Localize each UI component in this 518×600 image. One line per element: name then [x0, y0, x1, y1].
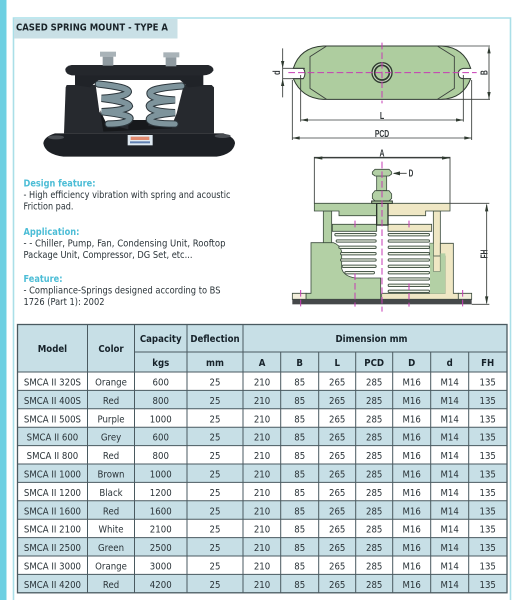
table header: mm [206, 357, 224, 369]
table rows: 800 [153, 451, 169, 462]
table rows: M16 [403, 543, 421, 554]
table rows: 265 [329, 579, 345, 591]
table rows: M16 [403, 451, 421, 462]
table rows: 85 [294, 451, 305, 462]
table rows: SMCA II 500S [24, 414, 81, 426]
table rows: Red [103, 579, 119, 591]
table rows: M14 [441, 451, 459, 462]
table rows: M14 [441, 414, 459, 426]
table rows: Red [103, 395, 119, 407]
table rows: 1200 [150, 487, 172, 499]
table header: PCD [364, 357, 384, 369]
table rows: M14 [441, 487, 459, 499]
table rows: M14 [441, 377, 459, 389]
plan view diagram: B [480, 70, 491, 75]
table rows: Orange [95, 377, 127, 389]
table rows: 85 [294, 432, 305, 444]
table rows: M16 [403, 469, 421, 481]
section view diagram: A [379, 149, 385, 160]
table rows: 135 [480, 561, 496, 573]
table rows: 135 [480, 395, 496, 407]
product photo: spring mount [43, 52, 235, 157]
table rows: 265 [329, 395, 345, 407]
table header: Capacity [140, 333, 182, 345]
table rows: 210 [254, 377, 270, 389]
table rows: 265 [329, 487, 345, 499]
table rows: 85 [294, 561, 305, 573]
table rows: 285 [366, 506, 382, 518]
table rows: 2100 [150, 524, 172, 536]
table rows: 265 [329, 432, 345, 444]
table rows: 210 [254, 506, 270, 518]
table rows: 135 [480, 524, 496, 536]
table rows: 285 [366, 561, 382, 573]
table rows: 210 [254, 432, 270, 444]
section view diagram: D [409, 169, 413, 180]
text block: feature: Feature: [24, 274, 62, 285]
plan view diagram: L [380, 111, 384, 122]
table rows: 265 [329, 377, 345, 389]
table rows: 285 [366, 377, 382, 389]
table rows: 285 [366, 469, 382, 481]
table rows: 285 [366, 524, 382, 536]
table rows: 600 [153, 377, 169, 389]
plan view diagram: PCD [375, 129, 389, 140]
table rows: Red [103, 506, 119, 518]
table header: Dimension mm [336, 333, 407, 345]
table rows: M16 [403, 377, 421, 389]
table rows: 135 [480, 487, 496, 499]
text block: application: Package Unit, Compressor, DG Set, etc... [24, 250, 192, 261]
text block: design feature [24, 178, 230, 212]
table rows: 265 [329, 414, 345, 426]
table rows: 4200 [150, 579, 172, 591]
table header: L [334, 357, 340, 369]
table rows: 265 [329, 524, 345, 536]
table rows: SMCA II 2500 [24, 543, 81, 554]
title: CASED SPRING MOUNT - TYPE A [16, 22, 168, 34]
table rows: 85 [294, 414, 305, 426]
table rows: SMCA II 4200 [24, 579, 81, 591]
text block: application: - - Chiller, Pump, Fan, Condensing Unit, Rooftop [24, 238, 226, 250]
text block: design feature: Design feature: [24, 178, 96, 190]
table rows: 135 [480, 432, 496, 444]
text block: feature: 1726 (Part 1): 2002 [24, 297, 104, 308]
table header: Deflection [190, 333, 240, 345]
plan view diagram: d [272, 70, 283, 75]
table rows: 85 [294, 543, 305, 554]
table rows: SMCA II 1000 [24, 469, 81, 481]
table rows: 210 [254, 561, 270, 573]
table rows: 600 [153, 432, 169, 444]
table rows: 85 [294, 506, 305, 518]
table header: B [296, 357, 303, 369]
table rows: Grey [101, 432, 122, 444]
table rows: M16 [403, 579, 421, 591]
table rows: 1600 [150, 506, 172, 518]
text block: application: Application: [24, 227, 80, 238]
table rows: M16 [403, 506, 421, 518]
table rows: 25 [210, 395, 221, 407]
table header: D [408, 357, 415, 369]
table rows: 25 [210, 524, 221, 536]
table rows: M16 [403, 395, 421, 407]
table rows: 265 [329, 506, 345, 518]
table rows: M16 [403, 561, 421, 573]
title [14, 19, 178, 38]
table rows: 25 [210, 543, 221, 554]
table header: FH [481, 357, 494, 369]
specification table [18, 324, 507, 593]
table rows: 265 [329, 469, 345, 481]
table rows: SMCA II 3000 [24, 561, 81, 573]
table rows: 135 [480, 451, 496, 462]
table rows: 285 [366, 543, 382, 554]
table rows: 85 [294, 469, 305, 481]
table header: Model [38, 343, 67, 355]
table rows: SMCA II 400S [24, 395, 81, 407]
table rows: SMCA II 1200 [24, 487, 81, 499]
table rows: Brown [98, 469, 125, 481]
table rows: 135 [480, 414, 496, 426]
table rows: Red [103, 451, 119, 462]
table header: Color [98, 343, 124, 355]
table rows: 2500 [150, 543, 172, 554]
table rows: Black [99, 487, 123, 499]
table rows: 210 [254, 579, 270, 591]
table rows: 1000 [150, 414, 172, 426]
table rows: M14 [441, 543, 459, 554]
table rows: 25 [210, 414, 221, 426]
table rows: M14 [441, 524, 459, 536]
table rows: 265 [329, 451, 345, 462]
table rows: 135 [480, 543, 496, 554]
table rows: 210 [254, 469, 270, 481]
table header [38, 333, 494, 369]
table rows: SMCA II 800 [27, 451, 78, 462]
table rows: 800 [153, 395, 169, 407]
table rows: 25 [210, 506, 221, 518]
table rows: 135 [480, 469, 496, 481]
table rows: M14 [441, 469, 459, 481]
table rows: 210 [254, 524, 270, 536]
table rows [24, 377, 496, 591]
table rows: 3000 [150, 561, 172, 573]
table rows: 85 [294, 579, 305, 591]
table rows: 85 [294, 377, 305, 389]
table rows: 210 [254, 395, 270, 407]
table rows: 285 [366, 579, 382, 591]
table rows: 85 [294, 395, 305, 407]
table rows: 25 [210, 561, 221, 573]
table rows: Green [98, 543, 124, 554]
section view diagram [292, 149, 491, 312]
table rows: M14 [441, 561, 459, 573]
table rows: M14 [441, 579, 459, 591]
table rows: 135 [480, 579, 496, 591]
table rows: SMCA II 600 [27, 432, 78, 444]
table rows: 285 [366, 451, 382, 462]
table rows: M16 [403, 487, 421, 499]
table rows: 25 [210, 377, 221, 389]
table rows: M16 [403, 524, 421, 536]
table rows: 285 [366, 395, 382, 407]
table rows: M16 [403, 414, 421, 426]
table rows: 135 [480, 506, 496, 518]
table rows: M14 [441, 432, 459, 444]
table rows: 135 [480, 377, 496, 389]
text block: design feature: - High efficiency vibration with spring and acoustic [24, 190, 230, 201]
table rows: M16 [403, 432, 421, 444]
table rows: SMCA II 1600 [24, 506, 81, 518]
table rows: 210 [254, 487, 270, 499]
table rows: 85 [294, 524, 305, 536]
table rows: M14 [441, 395, 459, 407]
table rows: Orange [95, 561, 127, 573]
table rows: 285 [366, 487, 382, 499]
table rows: SMCA II 2100 [24, 524, 81, 536]
table rows: 25 [210, 469, 221, 481]
text block: design feature: Friction pad. [24, 202, 74, 212]
table header: A [259, 357, 266, 369]
table rows: M14 [441, 506, 459, 518]
table rows: 85 [294, 487, 305, 499]
text block: application [24, 227, 226, 261]
table rows: 1000 [150, 469, 172, 481]
table rows: 25 [210, 451, 221, 462]
table rows: 265 [329, 543, 345, 554]
table rows: Purple [97, 414, 125, 426]
plan view diagram [272, 43, 491, 140]
section view diagram: FH [480, 250, 491, 258]
table rows: 285 [366, 414, 382, 426]
table rows: 210 [254, 543, 270, 554]
table rows: 210 [254, 414, 270, 426]
table header: kgs [152, 357, 170, 369]
text block: feature: - Compliance-Springs designed according to BS [24, 286, 220, 296]
table rows: 25 [210, 432, 221, 444]
table rows: 265 [329, 561, 345, 573]
table header: d [447, 357, 453, 369]
table rows: 25 [210, 579, 221, 591]
table rows: 210 [254, 451, 270, 462]
text block: feature [24, 274, 220, 308]
table rows: SMCA II 320S [24, 377, 81, 389]
table rows: 285 [366, 432, 382, 444]
table rows: White [99, 524, 124, 536]
table rows: 25 [210, 487, 221, 499]
